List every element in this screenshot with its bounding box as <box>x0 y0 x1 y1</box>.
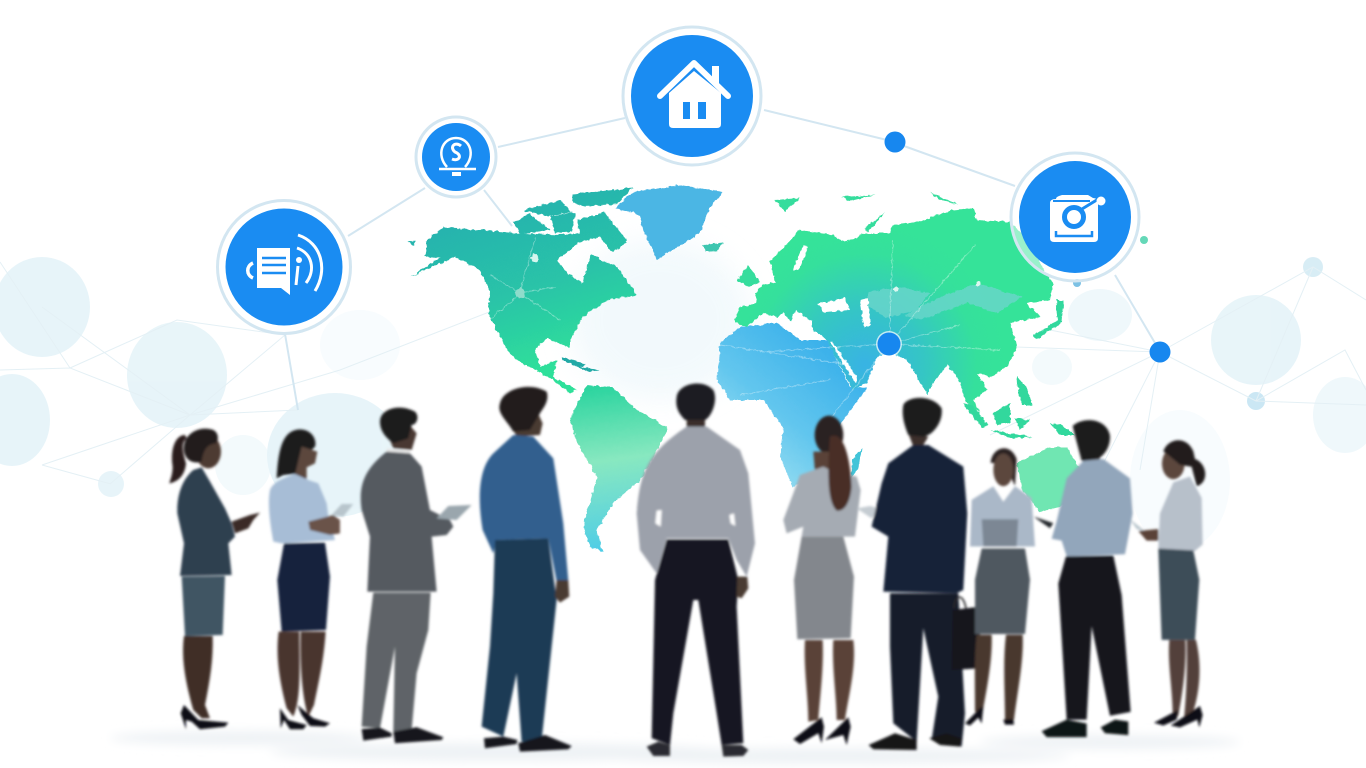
map network lines <box>490 238 1000 425</box>
person: woman in white blouse at far right <box>1130 440 1205 727</box>
person: woman facing viewer with tablet <box>965 448 1035 725</box>
small network nodes <box>876 132 1170 362</box>
person: woman with long ponytail <box>783 416 861 745</box>
icon node: chat and broadcast <box>218 200 350 334</box>
North America <box>408 188 637 393</box>
group of ten business people <box>169 383 1205 757</box>
Eurasia <box>735 208 1053 413</box>
background network pattern <box>0 240 1366 550</box>
UK and northern islands <box>737 192 958 287</box>
person: man in blue shirt <box>480 387 572 752</box>
person: man in grey suit with tablet <box>361 408 472 743</box>
Caribbean <box>562 357 600 372</box>
connector lines between icon nodes <box>285 110 1155 410</box>
icon node: home <box>623 27 761 165</box>
Madagascar <box>851 448 862 478</box>
person: central man seen from behind <box>637 383 755 757</box>
South-East Asia <box>963 375 1075 438</box>
floor reflection <box>110 731 1240 764</box>
Iceland <box>703 243 723 252</box>
person: woman in dark blazer <box>169 429 260 729</box>
icon node: idea bulb with dollar <box>416 117 496 197</box>
person: woman in light blue blouse <box>269 429 353 729</box>
person: man in light shirt <box>1033 420 1133 737</box>
Africa <box>717 323 867 487</box>
South America <box>570 385 668 552</box>
person: man in navy suit with briefcase <box>857 398 980 750</box>
icon node: media device <box>1011 153 1139 281</box>
world map <box>408 185 1080 552</box>
Japan <box>1033 300 1064 340</box>
Greenland <box>615 185 723 260</box>
teal inland highlights <box>868 283 1022 320</box>
inland seas <box>793 245 871 382</box>
Australia <box>1017 447 1080 512</box>
